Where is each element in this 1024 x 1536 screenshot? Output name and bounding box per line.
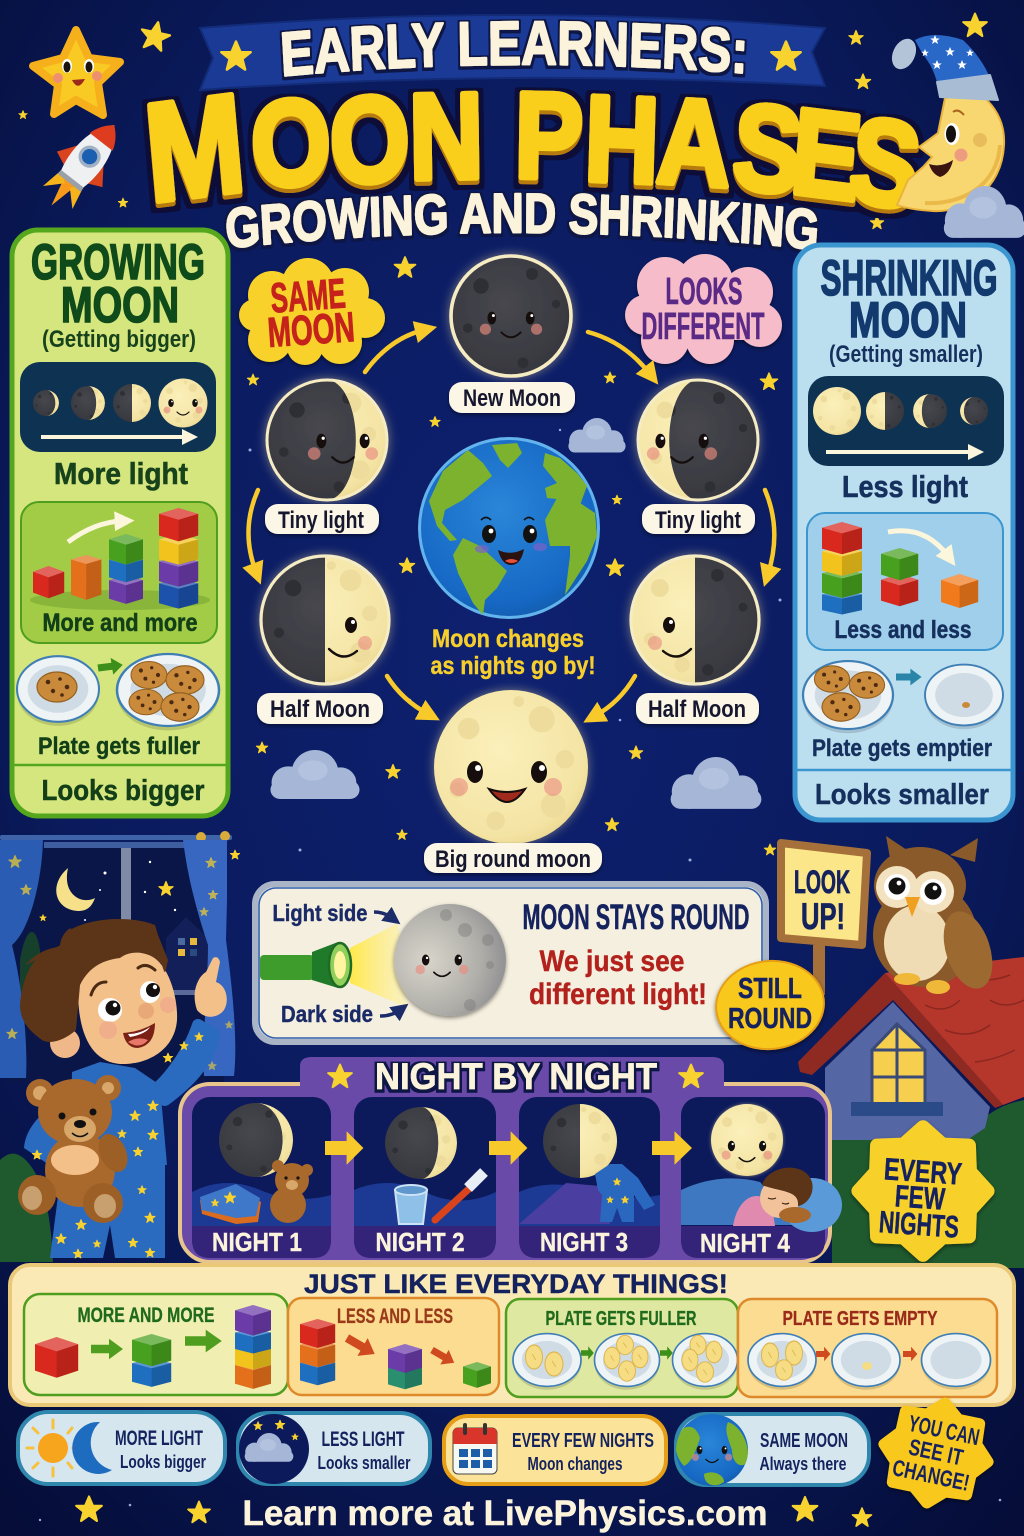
text: less and less: Less and less [834, 616, 972, 644]
text: every: EVERY [883, 1151, 963, 1192]
text: plate gets fuller: Plate gets fuller [38, 733, 200, 760]
title: LESS AND LESS [337, 1305, 453, 1328]
teddy bear [18, 1075, 133, 1223]
arrow: half moon to tiny light left [248, 490, 258, 572]
heading: growing: GROWING [31, 234, 205, 290]
ear [50, 1028, 80, 1058]
label: big round moon: Big round moon [435, 846, 591, 873]
text: different: DIFFERENT [642, 306, 764, 348]
half moon left [261, 556, 389, 684]
icon: smiling star [33, 30, 120, 115]
icon: rocket [29, 107, 137, 223]
hair [20, 919, 168, 1042]
sign: look up [781, 843, 867, 995]
text: night 2: NIGHT 2 [376, 1227, 464, 1257]
text: different light: different light! [529, 978, 707, 1011]
icon: calendar [453, 1423, 497, 1474]
text: less light: Less light [842, 469, 968, 504]
box: plate gets empty [738, 1299, 997, 1397]
banner star left [221, 42, 251, 70]
text: more light: More light [54, 456, 188, 491]
cloud lower right [671, 757, 761, 809]
subtitle: growing and shrinking: GROWING AND SHRINKING [224, 191, 820, 253]
heading: moon stays round: MOON STAYS ROUND [522, 898, 750, 937]
text: we just see: We just see [540, 945, 684, 978]
face details [91, 965, 176, 1048]
panel: just like everyday things [10, 1265, 1014, 1405]
head [78, 951, 177, 1064]
box: less and less [288, 1298, 499, 1395]
half moon right [631, 556, 759, 684]
label: tiny light right: Tiny light [655, 507, 741, 534]
box: plate gets fuller [506, 1299, 738, 1397]
box: more and more [24, 1294, 288, 1395]
text: plate gets emptier: Plate gets emptier [812, 735, 992, 762]
heading: moon: MOON [61, 277, 179, 333]
text: see it: SEE IT [906, 1434, 966, 1470]
text: still: STILL [738, 973, 802, 1005]
arrow: big moon to half moon right [595, 676, 635, 716]
text: moon changes: Moon changes [528, 1454, 622, 1474]
panel: night by night [180, 1056, 842, 1262]
text: nights: NIGHTS [878, 1204, 960, 1245]
text: moon changes: Moon changes [432, 625, 584, 653]
box: less and less blocks [807, 513, 1003, 650]
panel: shrinking moon [795, 245, 1013, 820]
owl [873, 836, 1001, 995]
window with night sky [0, 831, 235, 1082]
bushes right [832, 1100, 1024, 1268]
text: few: FEW [894, 1178, 947, 1217]
big round moon [434, 690, 588, 844]
text: look: LOOK [794, 864, 850, 900]
bushes left [0, 1154, 53, 1262]
panel: growing moon [12, 230, 228, 816]
icon: sun and moon [27, 1420, 112, 1476]
text: change: CHANGE! [890, 1454, 972, 1496]
panel: moon stays round [255, 884, 766, 1042]
text: always there: Always there [760, 1454, 846, 1474]
card: night 1 [192, 1097, 331, 1258]
wall [825, 1002, 990, 1140]
text: as nights go by: as nights go by! [430, 652, 596, 680]
new moon [451, 256, 571, 376]
box: more and more blocks [21, 502, 217, 643]
footer text: Learn more at LivePhysics.com [242, 1494, 768, 1533]
title: MORE AND MORE [78, 1304, 214, 1327]
label: dark side: Dark side [281, 1001, 373, 1027]
text: looks smaller: Looks smaller [318, 1453, 410, 1473]
text: same: SAME [269, 269, 347, 322]
child pointing up [20, 919, 227, 1258]
card: night 4 [681, 1097, 842, 1258]
callout: looks different [625, 254, 782, 364]
decorative cloud top right [944, 186, 1024, 238]
text: looks bigger: Looks bigger [120, 1452, 206, 1472]
icon: crescent moon with nightcap [887, 35, 1004, 211]
text: same moon: SAME MOON [760, 1430, 848, 1452]
pill: every few nights [444, 1416, 666, 1484]
text: night 4: NIGHT 4 [700, 1228, 790, 1258]
heading: moon: MOON [849, 292, 967, 348]
pill: less light [238, 1413, 430, 1484]
arrow: tiny light to half moon right [765, 490, 774, 574]
title: PLATE GETS FULLER [546, 1308, 697, 1330]
arrow: new moon from tiny light [365, 330, 424, 372]
footer stars [76, 1496, 872, 1526]
arrow: night 1 to 2 [325, 1131, 363, 1165]
arrow: dark side [380, 1010, 400, 1016]
text: more and more: More and more [42, 609, 198, 637]
raised sleeve [148, 1025, 214, 1100]
arrow: light side [374, 912, 392, 918]
left sleeve [24, 1095, 75, 1172]
tiny light moon left [267, 380, 387, 500]
heading: everyday things: JUST LIKE EVERYDAY THINGS! [304, 1269, 728, 1299]
plates: cookies growing [17, 654, 219, 730]
hand pointing [195, 957, 227, 1017]
text: night 3: NIGHT 3 [540, 1227, 628, 1257]
label: half moon right: Half Moon [648, 696, 746, 723]
text: moon: MOON [266, 303, 356, 356]
text: more light: MORE LIGHT [115, 1427, 203, 1450]
label: tiny light left: Tiny light [278, 507, 364, 534]
tiny light moon right [638, 380, 758, 500]
plates: cookies shrinking [803, 661, 1003, 733]
heading: night by night: NIGHT BY NIGHT [375, 1056, 657, 1097]
lit window [872, 1024, 925, 1107]
text: looks: LOOKS [666, 271, 742, 313]
title: PLATE GETS EMPTY [782, 1308, 938, 1330]
label: half moon left: Half Moon [270, 696, 370, 723]
title banner [198, 14, 826, 91]
main title: moon phases: MOON PHASES [139, 65, 927, 236]
callout: same moon [239, 258, 385, 365]
arrow: new moon to tiny light [588, 332, 650, 374]
text: looks bigger: Looks bigger [42, 775, 204, 807]
callout: you can see it change [875, 1394, 997, 1512]
moon strip: shrinking [808, 376, 1004, 466]
icon: earth [675, 1414, 748, 1486]
label: light side: Light side [272, 900, 368, 926]
pill: more light [18, 1412, 225, 1484]
moon half lit [394, 904, 506, 1016]
label: new moon: New Moon [463, 385, 561, 412]
torso [70, 1062, 167, 1165]
arrow: night 3 to 4 [652, 1131, 692, 1165]
cloud by earth [568, 418, 626, 453]
earth [418, 437, 600, 619]
pants [50, 1165, 165, 1258]
text: getting smaller: (Getting smaller) [829, 341, 983, 368]
callout: every few nights [858, 1127, 988, 1255]
banner star right [771, 42, 801, 70]
roof [885, 957, 1024, 1105]
callout: still round [712, 956, 828, 1054]
card: night 3 [519, 1097, 660, 1258]
heading: early learners: EARLY LEARNERS: [280, 19, 747, 80]
text: getting bigger: (Getting bigger) [42, 326, 196, 353]
house [798, 957, 1024, 1140]
text: you can: YOU CAN [906, 1410, 982, 1450]
text: up: UP! [801, 896, 845, 937]
text: less light: LESS LIGHT [322, 1428, 405, 1451]
pill: same moon [675, 1414, 869, 1486]
card: night 2 [354, 1097, 496, 1258]
arrow: half moon to big moon left [387, 676, 428, 714]
flashlight [260, 923, 408, 1008]
moon strip: growing [20, 362, 216, 452]
text: round: ROUND [728, 1003, 812, 1035]
text: night 1: NIGHT 1 [212, 1227, 302, 1257]
text: looks smaller: Looks smaller [815, 779, 989, 811]
icon: cloud at night [239, 1414, 309, 1484]
cloud lower left [270, 750, 360, 799]
text: every few nights: EVERY FEW NIGHTS [512, 1430, 654, 1452]
arrow: night 2 to 3 [489, 1131, 527, 1165]
